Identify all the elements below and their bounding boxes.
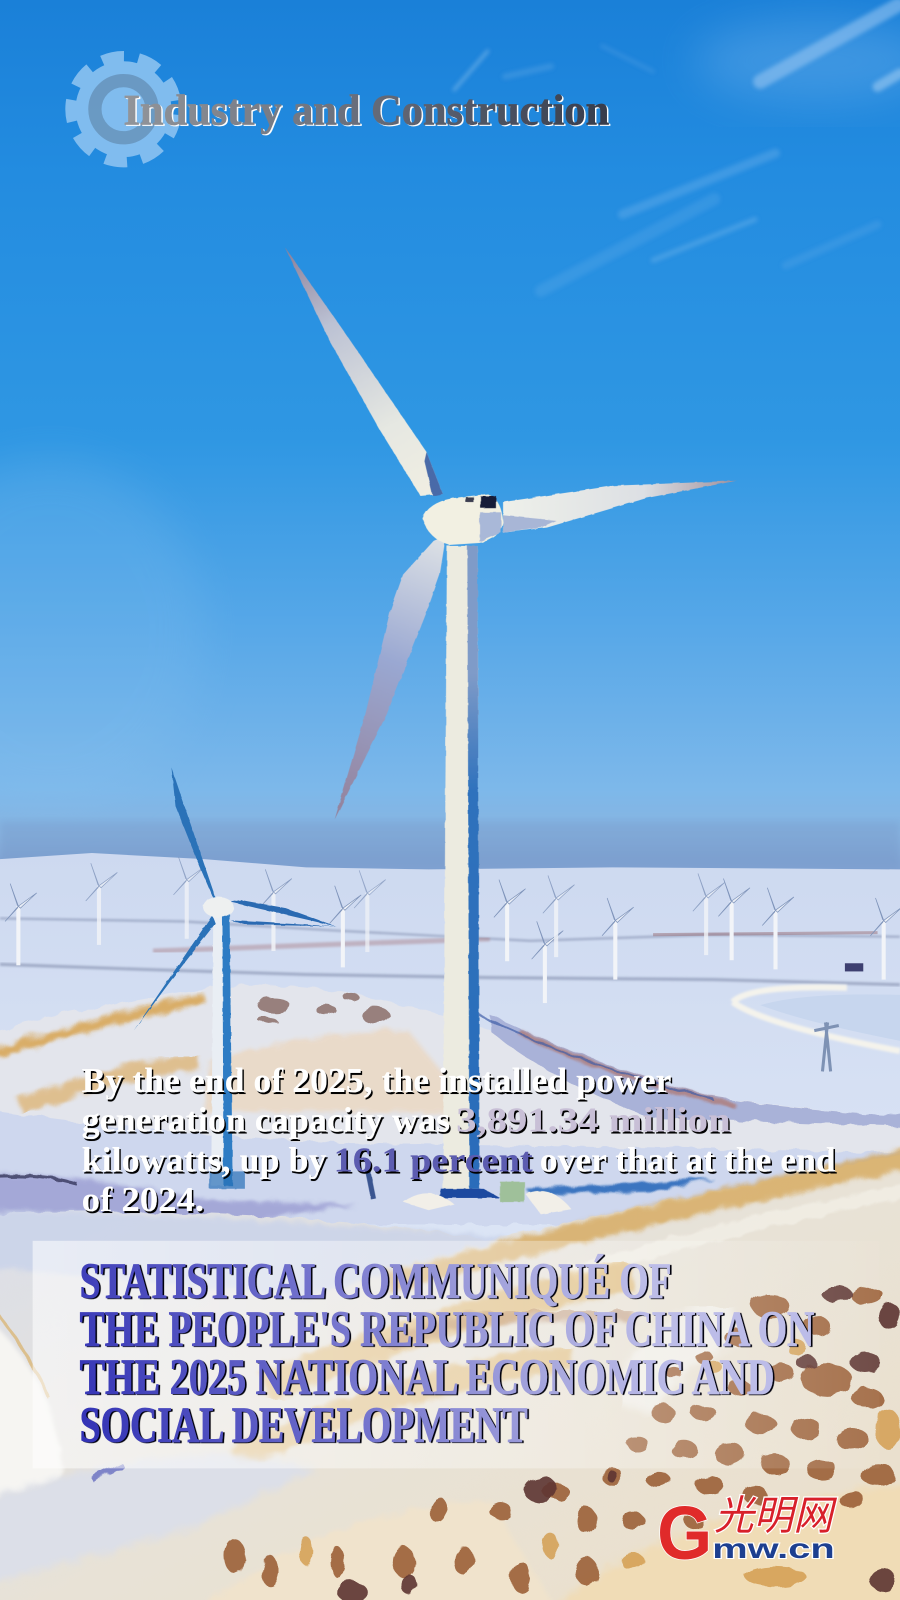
turbine blade: right bbox=[503, 481, 737, 533]
logo: gmw.cn: mw.cn bbox=[712, 1533, 835, 1564]
background painting: sky bbox=[0, 0, 900, 878]
far wind turbines bbox=[5, 857, 900, 1003]
heading: communique title bbox=[80, 1254, 814, 1454]
logo: gmw.cn bbox=[657, 1483, 838, 1576]
text block: installed power capacity bbox=[82, 1061, 836, 1219]
background painting: mound and ochre hills bbox=[0, 985, 900, 1230]
heading: communique title: STATISTICAL COMMUNIQUÉ OF bbox=[80, 1254, 671, 1310]
background painting: snowy plain bbox=[0, 853, 900, 1600]
text block: installed power capacity: By the end of 2025, the installed power bbox=[82, 1061, 671, 1100]
turbine tower bbox=[443, 546, 480, 1189]
background painting: brown scrub patches bbox=[224, 1286, 900, 1600]
turbine blade: lower bbox=[335, 536, 446, 819]
large wind turbine bbox=[285, 247, 737, 1189]
text block: installed power capacity: over that at the end bbox=[540, 1140, 836, 1179]
text block: installed power capacity: generation capacity was bbox=[82, 1101, 450, 1140]
background painting: snowy foreground bbox=[0, 1148, 900, 1600]
text block: installed power capacity: kilowatts, up by bbox=[82, 1140, 327, 1179]
icon: gear bbox=[67, 53, 180, 165]
logo: gmw.cn: 光明网 bbox=[714, 1483, 838, 1542]
heading: communique title: SOCIAL DEVELOPMENT bbox=[80, 1398, 528, 1454]
text block: installed power capacity: of 2024. bbox=[82, 1180, 204, 1219]
small wind turbine bbox=[134, 767, 337, 1189]
logo: gmw.cn: G bbox=[657, 1492, 712, 1576]
turbine base cabin bbox=[367, 1168, 571, 1214]
text block: installed power capacity: 16.1 percent bbox=[334, 1140, 533, 1179]
nacelle bbox=[422, 494, 503, 545]
title: Industry and Construction bbox=[123, 87, 609, 134]
text block: installed power capacity: 3,891.34 million bbox=[456, 1101, 731, 1140]
panel: translucent title backing bbox=[33, 1241, 880, 1468]
turbine blade: upper bbox=[285, 247, 443, 496]
turbine tower shaded side bbox=[467, 546, 480, 1189]
